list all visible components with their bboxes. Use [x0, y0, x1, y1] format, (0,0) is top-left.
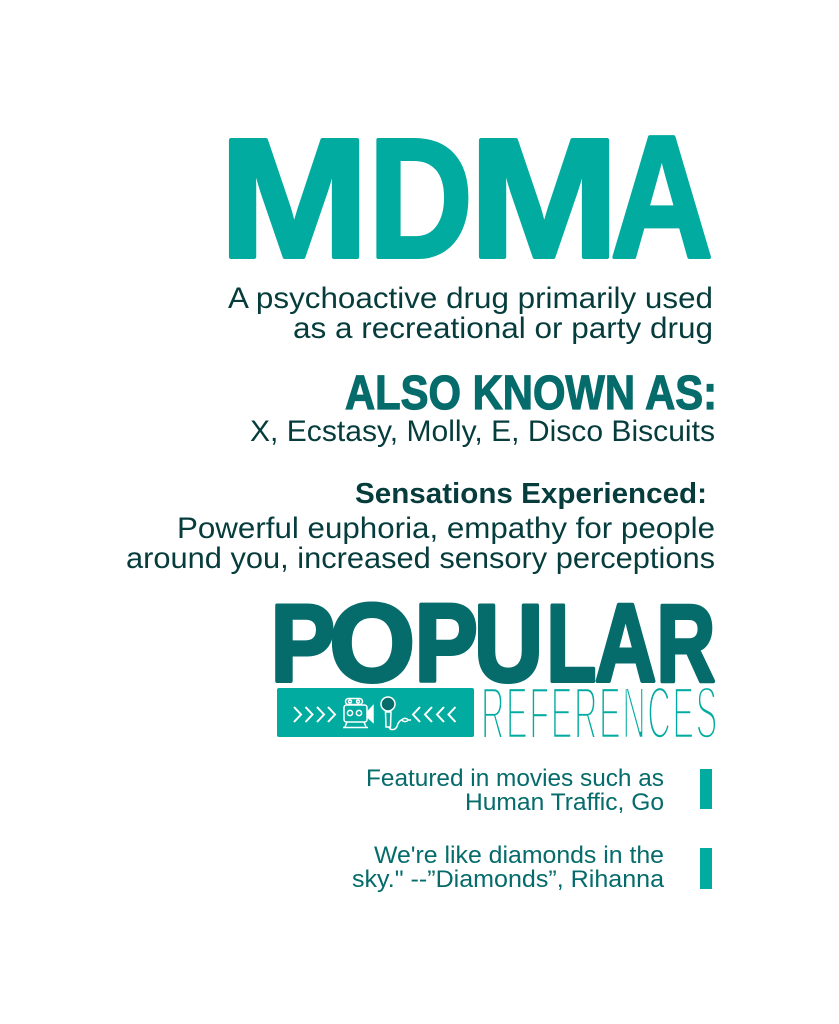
definition text: A psychoactive drug primarily used	[228, 282, 713, 315]
title: MDMA	[219, 99, 713, 294]
heading: popular: P	[270, 581, 335, 704]
reference: movies: Human Traffic, Go	[465, 789, 664, 816]
reference: movies: Featured in movies such as	[366, 765, 664, 792]
heading: also known as: ALSO KNOWN AS:	[345, 367, 717, 420]
heading: popular: R	[656, 581, 715, 705]
title: MDMA: M	[219, 104, 369, 294]
sensations text: around you, increased sensory perceptions	[126, 542, 715, 575]
reference: movies	[366, 765, 664, 816]
heading: popular: A	[595, 581, 656, 705]
title: MDMA: M	[469, 104, 619, 294]
sensations text: Powerful euphoria, empathy for people	[177, 512, 715, 545]
heading: popular: P	[415, 581, 478, 705]
reference: song: sky." --”Diamonds”, Rihanna	[352, 866, 665, 893]
heading: references: REFERENCES	[481, 672, 717, 755]
heading: sensations experienced: Sensations Experienced:	[355, 478, 707, 510]
icon: microphone	[381, 697, 411, 730]
icon: right chevrons	[294, 707, 335, 722]
reference: song	[352, 842, 665, 893]
heading: popular: L	[546, 581, 596, 705]
bar marker 2	[700, 848, 712, 889]
definition text: as a recreational or party drug	[293, 312, 713, 345]
icon: movie camera	[343, 698, 373, 728]
title: MDMA: A	[610, 99, 713, 294]
icon: left chevrons	[413, 707, 456, 722]
heading: popular	[270, 581, 715, 705]
street names: X, Ecstasy, Molly, E, Disco Biscuits	[250, 415, 715, 448]
bar marker 1	[700, 769, 712, 809]
title: MDMA: D	[368, 104, 473, 294]
banner with icons	[277, 688, 474, 737]
reference: song: We're like diamonds in the	[374, 842, 664, 869]
definition text	[228, 282, 713, 345]
heading: popular: O	[329, 582, 415, 705]
sensations text	[126, 512, 715, 575]
heading: popular: U	[474, 582, 543, 704]
